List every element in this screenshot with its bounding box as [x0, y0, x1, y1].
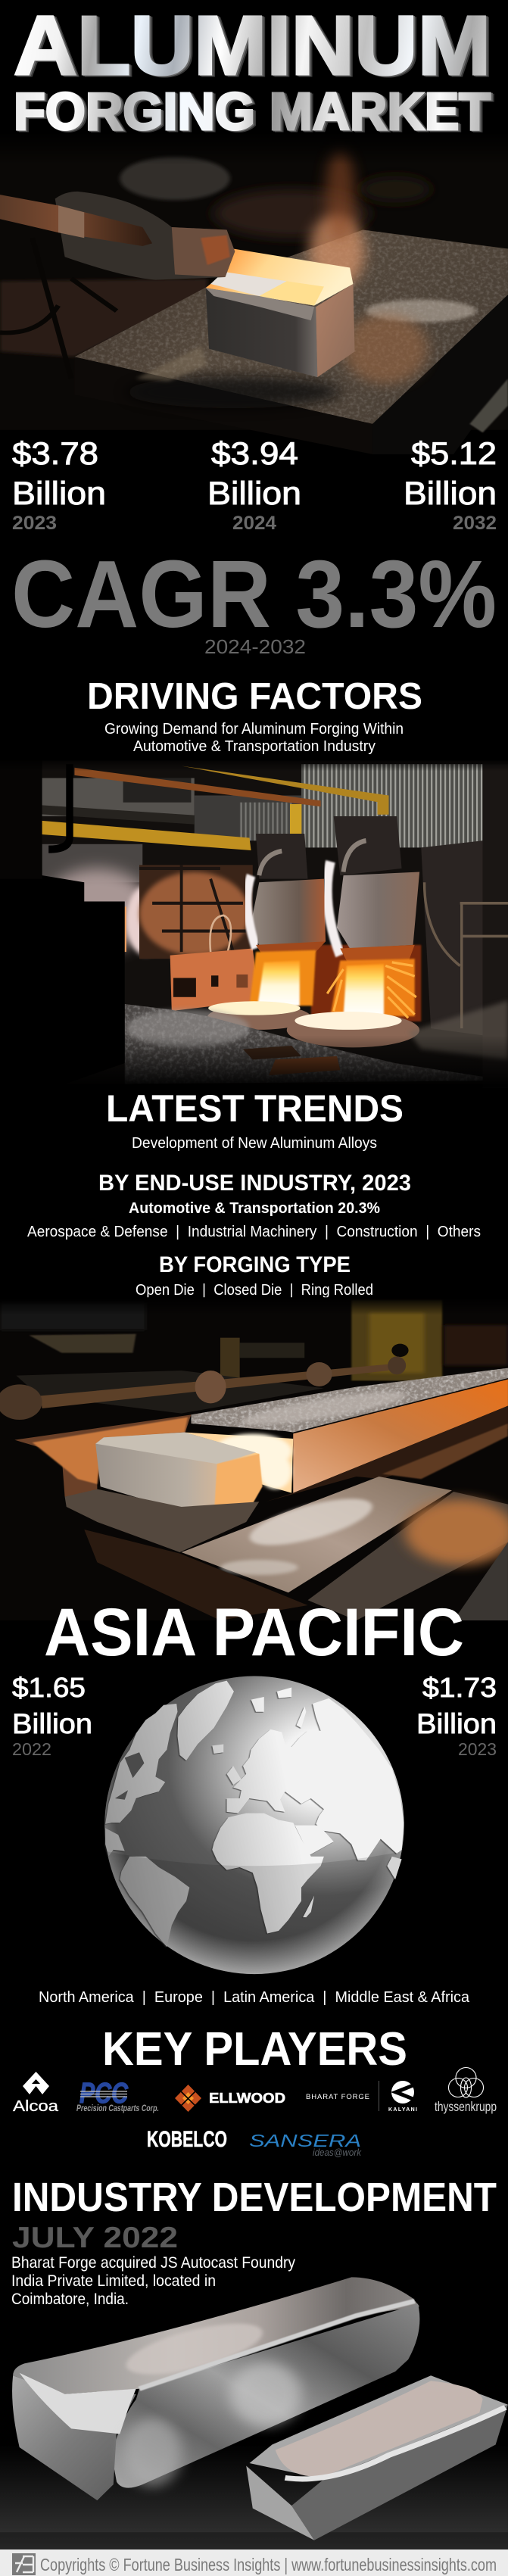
- logos: [13, 2067, 497, 2158]
- roller rod: [0, 1356, 406, 1420]
- central machinery: [139, 865, 253, 959]
- asia pacific heading: ASIA PACIFIC: [44, 1594, 464, 1670]
- overhead beams: [10, 808, 195, 820]
- development description: Bharat Forge acquired JS Autocast Foundry: [11, 2254, 295, 2272]
- regional stat 2022: $1.65: [12, 1672, 86, 1703]
- reflective floor: [0, 2444, 508, 2549]
- flame and smoke: [310, 214, 364, 289]
- large ingot: [12, 2277, 419, 2500]
- stat 2024: $3.94: [211, 435, 298, 471]
- regional stat 2022: Billion: [12, 1708, 92, 1739]
- logo: PCC: PCC: [79, 2078, 128, 2110]
- by end-use industry: BY END-USE INDUSTRY, 2023: [98, 1171, 411, 1196]
- regional stat 2023: $1.73: [422, 1672, 497, 1703]
- stat 2024: [207, 435, 301, 534]
- small ingot: [246, 2375, 508, 2540]
- regional stat 2022: [12, 1672, 92, 1759]
- market size stats: [12, 435, 497, 534]
- foreground silhouette: [0, 869, 125, 1091]
- right side structures: [421, 840, 483, 1035]
- window glow: [86, 906, 126, 952]
- floor: [125, 1004, 508, 1084]
- regional stat 2022: 2022: [12, 1739, 51, 1759]
- by end-use industry: Automotive & Transportation 20.3%: [129, 1200, 380, 1217]
- ladle right: [287, 816, 419, 1047]
- footer: [0, 2549, 508, 2576]
- logo: Bharat Forge Kalyani: KALYANI: [388, 2107, 417, 2113]
- logo: PCC: Precision Castparts Corp.: [76, 2104, 159, 2113]
- stat 2032: 2032: [453, 513, 497, 534]
- other regions: North America | Europe | Latin America | Middle East & Africa: [39, 1989, 470, 2006]
- logo: Ellwood: ELLWOOD: [209, 2091, 285, 2106]
- tongs: [55, 192, 235, 280]
- globe: [104, 1676, 404, 2000]
- hero image: hot aluminum block on anvil: [0, 133, 508, 454]
- long glowing bar: [14, 1368, 508, 1502]
- title: [14, 0, 491, 141]
- continents: [105, 1681, 404, 1947]
- latest trends: Development of New Aluminum Alloys: [132, 1135, 377, 1152]
- work table: [65, 1477, 508, 1620]
- glowing furnace backdrop: [311, 945, 421, 1021]
- stat 2032: Billion: [404, 476, 497, 512]
- regional stat 2023: Billion: [416, 1708, 497, 1739]
- stat 2023: Billion: [12, 476, 106, 512]
- ladle left: [207, 834, 326, 1030]
- foundry image: ladles pouring molten metal: [0, 757, 508, 1091]
- anvil plate: [74, 230, 508, 424]
- logo: Sansera: ideas@work: [313, 2147, 362, 2158]
- driving factors: Automotive & Transportation Industry: [133, 738, 376, 755]
- driving factors: Growing Demand for Aluminum Forging Within: [104, 721, 404, 738]
- by forging type: [136, 1252, 373, 1299]
- stat 2032: $5.12: [411, 435, 497, 471]
- latest trends: [106, 1087, 404, 1152]
- development description: India Private Limited, located in: [11, 2272, 216, 2290]
- CAGR figure: 2024-2032: [204, 635, 306, 658]
- logo: Kobelco: KOBELCO: [147, 2127, 227, 2152]
- by forging type: Open Die | Closed Die | Ring Rolled: [136, 1282, 373, 1299]
- industry development image: aluminum ingots: [0, 2277, 508, 2549]
- forged block: [206, 288, 317, 377]
- logo: Bharat Forge Kalyani: [306, 2081, 418, 2113]
- logo: PCC: [76, 2078, 159, 2113]
- by forging type: BY FORGING TYPE: [159, 1252, 351, 1277]
- icon: brand mark: [12, 2553, 36, 2575]
- date: JULY 2022: [12, 2222, 178, 2254]
- development description: Coimbatore, India.: [11, 2291, 129, 2308]
- stat 2024: 2024: [232, 513, 276, 534]
- development description: [11, 2254, 295, 2308]
- by end-use industry: Aerospace & Defense | Industrial Machinery | Construction | Others: [27, 1224, 481, 1240]
- title: FORGING MARKET: [14, 82, 491, 141]
- stat 2023: 2023: [12, 513, 57, 534]
- logo: Ellwood: [175, 2085, 285, 2112]
- driving factors: DRIVING FACTORS: [87, 676, 422, 717]
- latest trends: LATEST TRENDS: [106, 1087, 404, 1130]
- small ingot: [95, 1433, 263, 1520]
- hot aluminum bar image: [0, 1297, 508, 1620]
- stat 2023: [12, 435, 106, 534]
- driving factors: [87, 676, 422, 755]
- logo: Sansera: SANSERA: [249, 2131, 361, 2150]
- regional stat 2023: 2023: [458, 1739, 497, 1759]
- stat 2032: [404, 435, 497, 534]
- title: ALUMINUM: [14, 0, 491, 92]
- logo: thyssenkrupp: [435, 2067, 497, 2114]
- regional stat 2023: [416, 1672, 497, 1759]
- logo: Bharat Forge Kalyani: BHARAT FORGE: [306, 2093, 369, 2101]
- key players heading: KEY PLAYERS: [102, 2023, 407, 2075]
- logo: Alcoa: Alcoa: [13, 2098, 59, 2115]
- logo: Alcoa: [13, 2072, 59, 2115]
- by end-use industry: [27, 1171, 481, 1240]
- stat 2024: Billion: [207, 476, 301, 512]
- stat 2023: $3.78: [12, 435, 98, 471]
- logo: Sansera: [249, 2131, 362, 2158]
